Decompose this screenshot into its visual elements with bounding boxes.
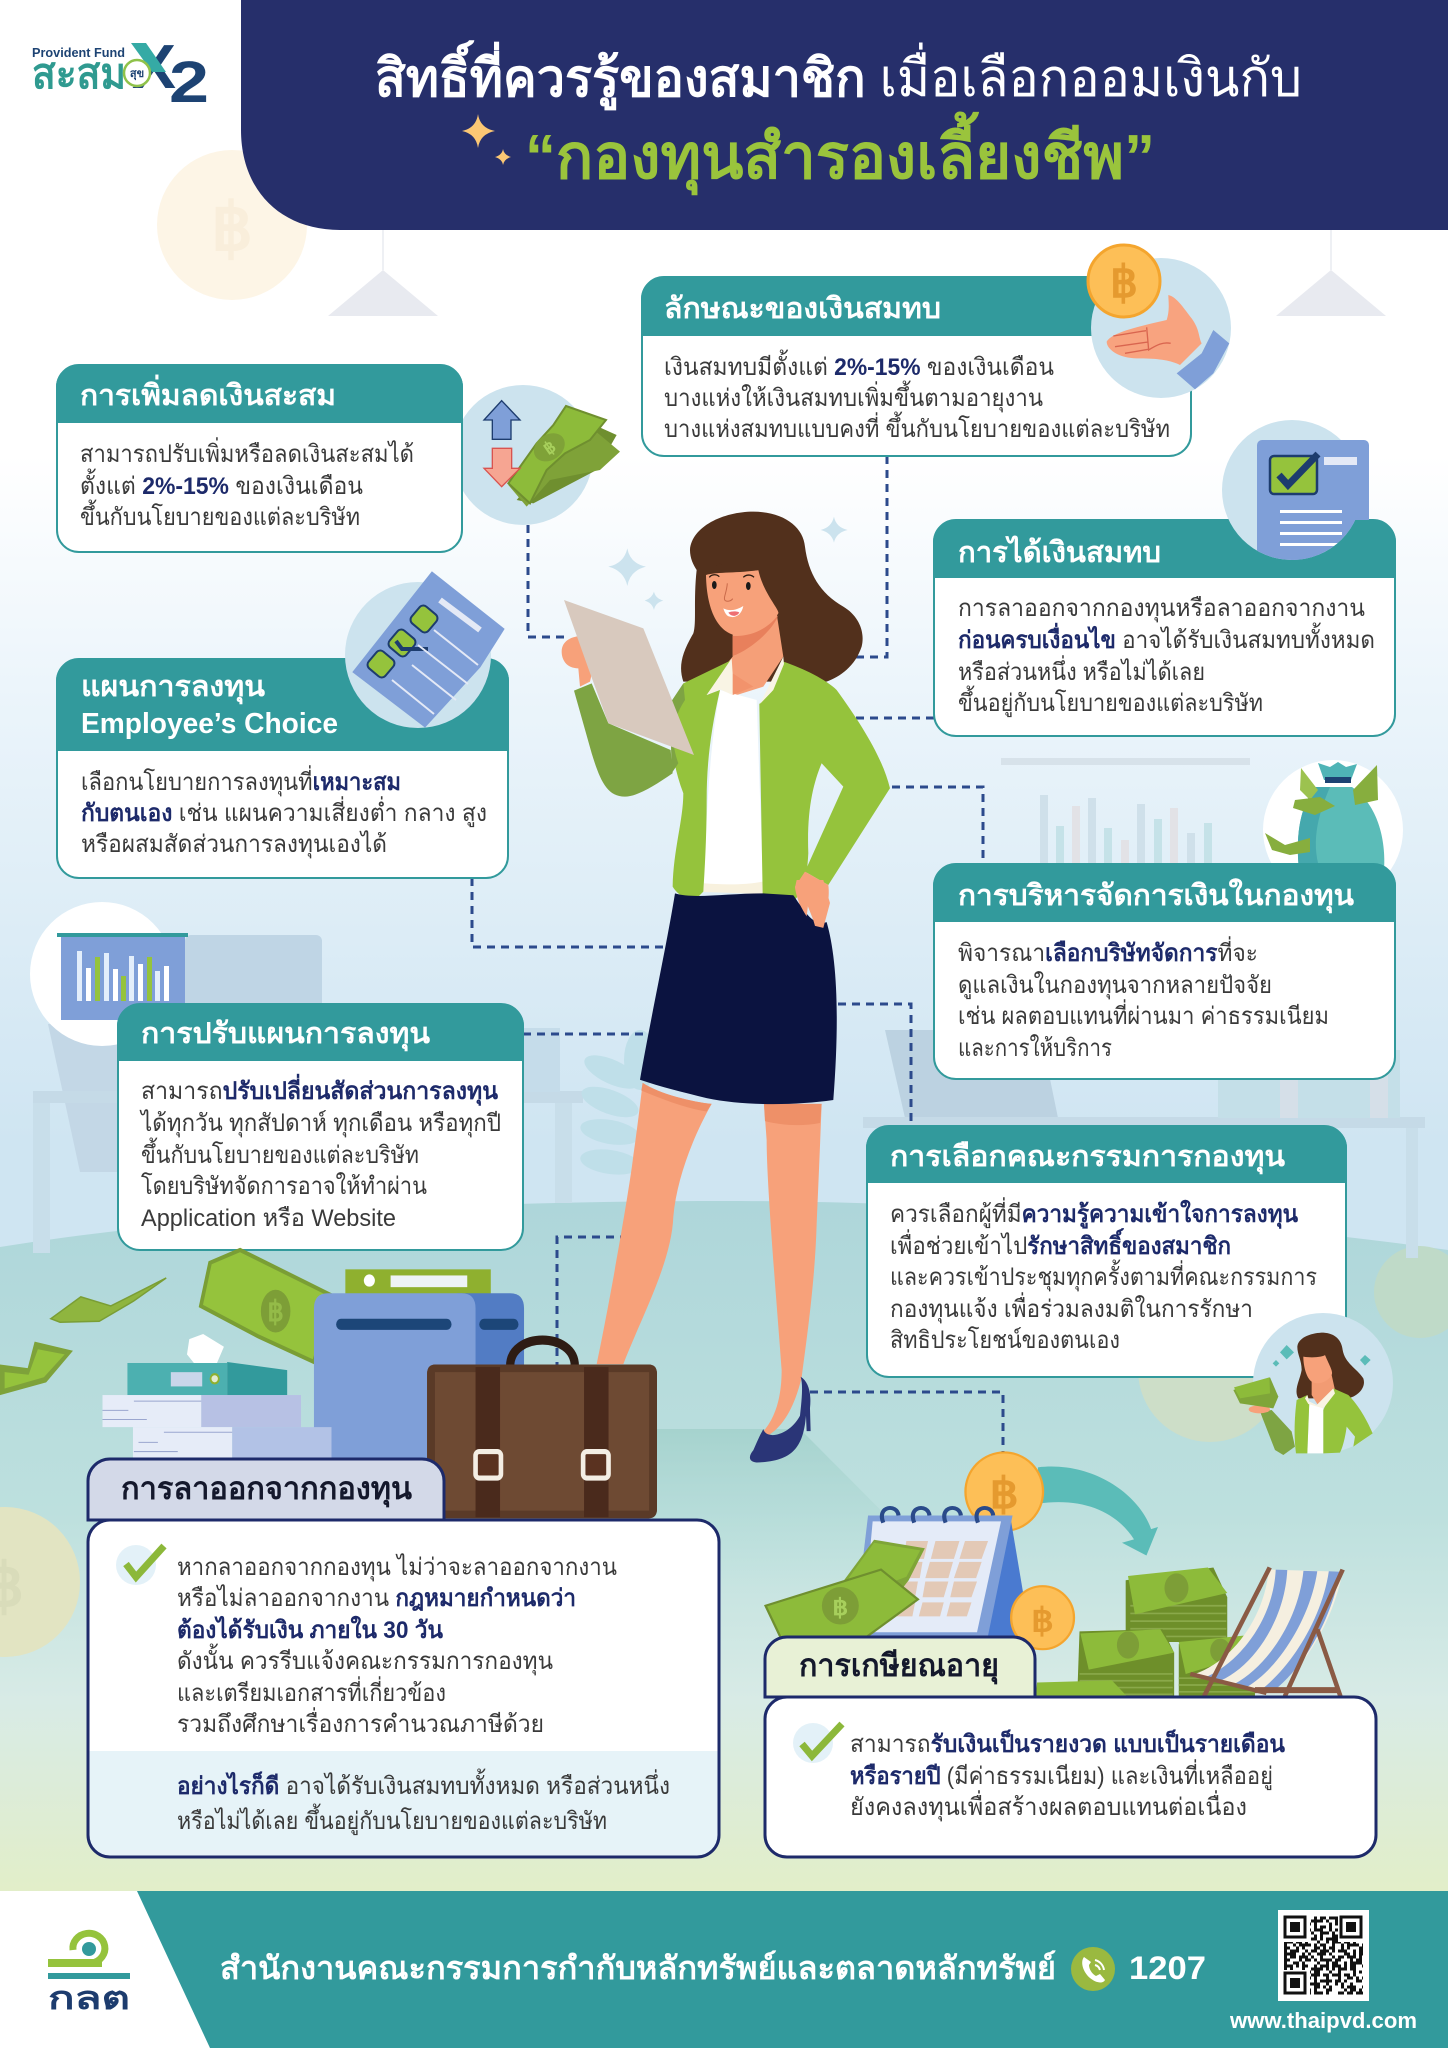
connector: leave panel to figure [557, 1237, 625, 1370]
connector: card 7 to figure [838, 1004, 911, 1128]
panel: fund management: และการให้บริการ [958, 1034, 1112, 1062]
panel: employee's choice: กับตนเอง เช่น แผนความเสี่ยงต่ำ กลาง สูง [81, 796, 487, 828]
panel: retirement: การเกษียณอายุ [799, 1648, 999, 1685]
panel: leaving the fund: ต้องได้รับเงิน ภายใน 30 วัน [177, 1615, 444, 1644]
panel: leaving the fund: การลาออกจากกองทุน [121, 1471, 412, 1508]
panel: receiving contributions: การลาออกจากกองทุนหรือลาออกจากงาน [958, 595, 1365, 623]
deck chair [1195, 1570, 1343, 1693]
connector: card 6 to figure [892, 787, 983, 866]
panel: leaving the fund: หรือไม่ลาออกจากงาน กฎหมายกำหนดว่า [177, 1584, 576, 1612]
panel: savings adjustment: การเพิ่มลดเงินสะสม [80, 374, 336, 412]
illustration: calendar, coins, cash stacks and deck chair [766, 1452, 1343, 1697]
illustration: cash, binders and briefcase [0, 1250, 657, 1518]
panel: employee's choice: Employee’s Choice [81, 708, 338, 740]
panel: retirement: สามารถรับเงินเป็นรายงวด แบบเป็นรายเดือน [850, 1729, 1286, 1758]
panel: leaving the fund: อย่างไรก็ดี อาจได้รับเงินสมทบทั้งหมด หรือส่วนหนึ่ง [177, 1768, 670, 1800]
panel: fund committee: เพื่อช่วยเข้าไปรักษาสิทธิ์ของสมาชิก [890, 1228, 1231, 1260]
panel: contribution characteristics [641, 277, 1192, 456]
panel: adjusting investment plan: ขึ้นกับนโยบายของแต่ละบริษัท [141, 1137, 419, 1169]
panel: leaving the fund [88, 1459, 719, 1857]
logo: SEC [48, 1933, 130, 2016]
panel: leaving the fund: รวมถึงศึกษาเรื่องการคำนวณภาษีด้วย [177, 1707, 544, 1738]
panel: fund committee: กองทุนแจ้ง เพื่อร่วมลงมติในการรักษา [890, 1292, 1253, 1324]
footer [0, 1891, 1448, 2048]
icon: coin and hand: ฿ [1110, 258, 1138, 307]
icon: checked document [1222, 420, 1369, 570]
figure: woman with paper [562, 512, 890, 1462]
title [375, 40, 1302, 195]
logo: provident fund: X [132, 33, 176, 102]
connector: retirement to figure [810, 1392, 1003, 1457]
illustration: calendar, coins, cash stacks and deck chair: ฿ [832, 1595, 848, 1621]
icon: check mark [793, 1723, 842, 1763]
logo: SEC: กลต [48, 1980, 130, 2016]
illustration: calendar, coins, cash stacks and deck chair: ฿ [990, 1470, 1019, 1517]
panel: adjusting investment plan [117, 1004, 524, 1250]
panel: fund committee: และควรเข้าประชุมทุกครั้งตามที่คณะกรรมการ [890, 1259, 1317, 1292]
logo: provident fund: สุข [130, 68, 144, 81]
connector: card 1 to figure [528, 525, 570, 637]
panel: receiving contributions: ขึ้นอยู่กับนโยบายของแต่ละบริษัท [958, 685, 1263, 718]
footer: สำนักงานคณะกรรมการกำกับหลักทรัพย์และตลาดหลักทรัพย์ [220, 1950, 1056, 1986]
panel: contribution characteristics: บางแห่งให้เงินสมทบเพิ่มขึ้นตามอายุงาน [664, 380, 1043, 413]
faded decorations: ฿ [211, 190, 253, 264]
logo: provident fund: สะสม [32, 50, 126, 97]
icon: money and arrows circle [453, 385, 620, 525]
header banner [241, 0, 1448, 230]
panel: employee's choice [56, 659, 509, 878]
panel: fund management: การบริหารจัดการเงินในกองทุน [958, 878, 1354, 913]
panel: receiving contributions: หรือส่วนหนึ่ง หรือไม่ได้เลย [958, 655, 1205, 686]
jacket left side [671, 660, 732, 902]
jacket right side [759, 662, 890, 908]
panel: adjusting investment plan: ได้ทุกวัน ทุกสัปดาห์ ทุกเดือน หรือทุกปี [139, 1109, 501, 1138]
panel: fund committee: สิทธิประโยชน์ของตนเอง [890, 1326, 1120, 1354]
logo: provident fund: Provident Fund [32, 45, 125, 60]
icon: sparkles [462, 114, 511, 165]
illustration: calendar, coins, cash stacks and deck chair: ฿ [1031, 1603, 1054, 1639]
logo: provident fund [32, 33, 209, 115]
icon: money and arrows circle: ฿ [540, 437, 560, 459]
panel: savings adjustment: สามารถปรับเพิ่มหรือลดเงินสะสมได้ [80, 437, 414, 468]
panel: receiving contributions [933, 520, 1396, 736]
sparkles near woman [608, 517, 848, 610]
icon: money bag [1263, 760, 1403, 900]
logo: provident fund: 2 [169, 50, 209, 115]
panel: receiving contributions: ก่อนครบเงื่อนไข อาจได้รับเงินสมทบทั้งหมด [958, 622, 1375, 654]
connector: card 5 to figure [523, 1032, 650, 1036]
panel: savings adjustment: ตั้งแต่ 2%-15% ของเงินเดือน [80, 468, 363, 500]
panel: receiving contributions: การได้เงินสมทบ [958, 535, 1161, 569]
connector: card 2 to figure [850, 456, 887, 657]
panel: contribution characteristics: บางแห่งสมทบแบบคงที่ ขึ้นกับนโยบายของแต่ละบริษัท [664, 411, 1170, 443]
panel: employee's choice: แผนการลงทุน [81, 671, 265, 704]
faded decorations [0, 150, 1448, 1657]
panel: fund committee: การเลือกคณะกรรมการกองทุน [890, 1141, 1285, 1174]
icon: coin and hand [1088, 245, 1231, 398]
panel: fund management [933, 864, 1396, 1079]
icon: phone [1071, 1947, 1115, 1991]
cash stacks [1126, 1567, 1227, 1642]
panel: fund committee [866, 1126, 1347, 1377]
panel: retirement [765, 1637, 1376, 1857]
panel: adjusting investment plan: Application หรือ Website [141, 1205, 396, 1232]
icon: check mark [116, 1545, 164, 1585]
panel: retirement: ยังคงลงทุนเพื่อสร้างผลตอบแทนต่อเนื่อง [850, 1790, 1247, 1822]
icon: small woman with cash [1233, 1313, 1393, 1455]
panel: leaving the fund: ดังนั้น ควรรีบแจ้งคณะกรรมการกองทุน [177, 1643, 553, 1676]
connector: card 3 to figure [855, 716, 934, 720]
panel: fund committee: ควรเลือกผู้ที่มีความรู้ความเข้าใจการลงทุน [890, 1197, 1299, 1230]
title: สิทธิ์ที่ควรรู้ของสมาชิก เมื่อเลือกออมเงินกับ [375, 40, 1302, 111]
panel: adjusting investment plan: การปรับแผนการลงทุน [141, 1018, 430, 1051]
panel: contribution characteristics: เงินสมทบมีตั้งแต่ 2%-15% ของเงินเดือน [664, 349, 1054, 381]
panel: fund management: พิจารณาเลือกบริษัทจัดการที่จะ [958, 936, 1258, 967]
panel: employee's choice: เลือกนโยบายการลงทุนที่เหมาะสม [81, 765, 401, 797]
footer: 1207 [1129, 1950, 1206, 1986]
panel: employee's choice: หรือผสมสัดส่วนการลงทุนเองได้ [81, 830, 387, 859]
panel: savings adjustment [56, 365, 463, 552]
QR code [1278, 1910, 1369, 2001]
connector: card 4 to figure [472, 878, 665, 947]
illustration: cash, binders and briefcase: ฿ [267, 1295, 284, 1328]
footer: www.thaipvd.com [1229, 2008, 1417, 2033]
panel: adjusting investment plan: สามารถปรับเปลี่ยนสัดส่วนการลงทุน [141, 1073, 499, 1107]
title: “กองทุนสำรองเลี้ยงชีพ” [525, 111, 1155, 195]
panel: fund management: ดูแลเงินในกองทุนจากหลายปัจจัย [958, 971, 1272, 1000]
icon: bar chart board [30, 902, 188, 1046]
panel: leaving the fund: หรือไม่ได้เลย ขึ้นอยู่กับนโยบายของแต่ละบริษัท [177, 1803, 607, 1836]
legs and skirt [597, 880, 837, 1462]
panel: adjusting investment plan: โดยบริษัทจัดการอาจให้ทำผ่าน [141, 1172, 427, 1200]
panel: leaving the fund: และเตรียมเอกสารที่เกี่ยวข้อง [177, 1676, 446, 1707]
icon: investment checklist [345, 572, 504, 728]
panel: savings adjustment: ขึ้นกับนโยบายของแต่ละบริษัท [80, 499, 360, 531]
panel: contribution characteristics: ลักษณะของเงินสมทบ [664, 293, 941, 325]
panel: retirement: หรือรายปี (มีค่าธรรมเนียม) และเงินที่เหลืออยู่ [850, 1759, 1273, 1791]
panel: leaving the fund: หากลาออกจากกองทุน ไม่ว่าจะลาออกจากงาน [177, 1553, 617, 1582]
panel: fund management: เช่น ผลตอบแทนที่ผ่านมา ค่าธรรมเนียม [958, 999, 1329, 1030]
